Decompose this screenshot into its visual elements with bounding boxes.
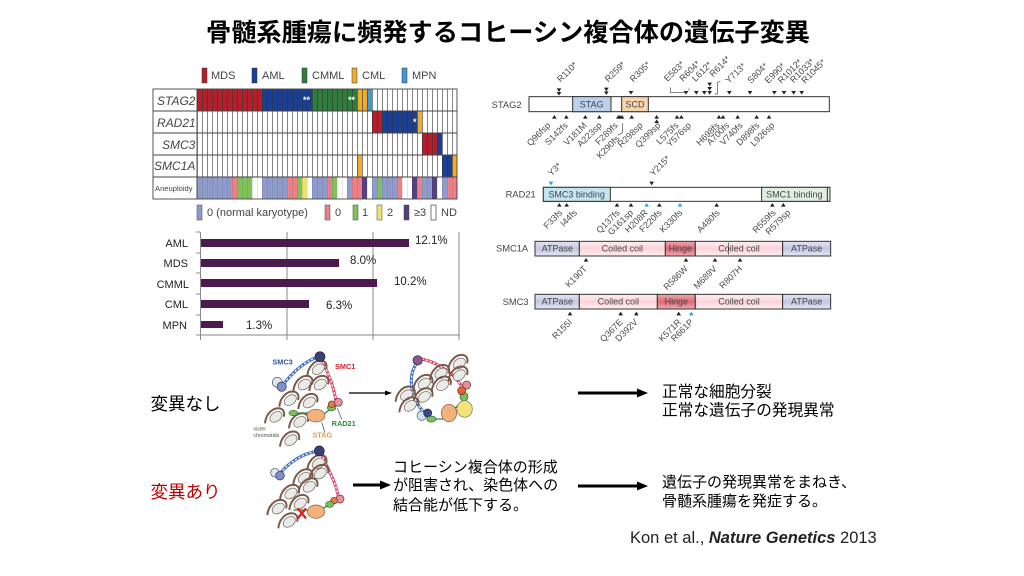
- mutation labels: Q367E: [598, 317, 625, 344]
- mutation labels below: S142fs: [543, 120, 570, 147]
- mutation labels above: R1012*: [776, 57, 804, 85]
- mutation labels: D392V: [613, 317, 640, 344]
- arrow: mutated outcome: [578, 482, 648, 490]
- icon: red cross: [298, 508, 306, 518]
- category labels: AML: [165, 238, 188, 250]
- protein map: SMC1A: Coiled coil: [602, 244, 643, 254]
- legend: karyotype: 0: [335, 207, 341, 219]
- mutation labels below: Q399sp: [633, 120, 662, 150]
- mutation labels: R807H: [717, 264, 744, 291]
- protein map: RAD21: RAD21: [506, 190, 536, 200]
- mutation labels: [546, 153, 672, 178]
- mutation labels above: S804*: [745, 61, 770, 85]
- legend: karyotype: 0 (normal karyotype): [207, 207, 308, 219]
- legend: disease types: MPN: [412, 70, 436, 82]
- legend: disease types: AML: [262, 70, 285, 82]
- mutation labels: Y3*: [546, 160, 564, 178]
- illustration: intact cohesin open: [253, 352, 356, 448]
- mutation labels below: V740fs: [718, 120, 745, 147]
- protein map: STAG2: [492, 54, 829, 161]
- illustration: intact cohesin open: sister: [253, 426, 266, 432]
- oncoprint grid: Aneuploidy: [155, 184, 193, 193]
- illustration: intact cohesin open: STAG: [312, 431, 332, 440]
- oncoprint grid: **: [303, 95, 311, 105]
- mutation labels below: Q96fsp: [525, 120, 552, 148]
- protein map: SMC3: Coiled coil: [718, 297, 760, 307]
- text: mutated outcome: 遺伝子の発現異常をまねき、: [662, 474, 856, 491]
- protein map: SMC1A: Coiled coil: [718, 244, 760, 254]
- arrow: intact to closed: [349, 390, 392, 396]
- illustration: intact cohesin open: chromatids: [253, 433, 280, 439]
- panel: mutation oncoprint: [153, 68, 457, 220]
- legend: disease types: MDS: [211, 70, 235, 82]
- illustration: intact cohesin open: SMC1: [335, 362, 355, 371]
- protein map: STAG2: SCD: [626, 99, 645, 109]
- value labels: 10.2%: [394, 276, 427, 288]
- value labels: 8.0%: [350, 255, 376, 267]
- legend: karyotype: ≥3: [414, 207, 426, 219]
- arrow: normal outcome: [578, 388, 648, 398]
- text: mutated outcome: 骨髄系腫瘍を発症する。: [662, 492, 827, 510]
- protein map: SMC3: Coiled coil: [598, 297, 639, 307]
- protein map: RAD21: K330fs: [658, 207, 685, 235]
- mutation labels above: L612*: [690, 59, 714, 83]
- mutation labels: M689V: [692, 264, 719, 291]
- mutation labels below: F289fs: [593, 120, 620, 147]
- text: cohesin formation impaired: が阻害され、染色体への: [393, 477, 558, 494]
- protein map: SMC3: SMC3: [503, 297, 529, 307]
- protein map: RAD21: A480fs: [695, 207, 722, 235]
- legend: karyotype: 2: [387, 207, 393, 219]
- protein map: RAD21: H208R: [623, 207, 650, 235]
- protein map: RAD21: R579sp: [763, 208, 792, 237]
- protein map: RAD21: F220fs: [637, 207, 664, 234]
- protein map: RAD21: Q137fs: [594, 207, 622, 235]
- legend: disease types: CMML: [312, 70, 344, 82]
- mutation labels above: R1045*: [799, 57, 828, 85]
- mutation labels: K571R: [657, 317, 683, 344]
- protein map: SMC3: ATPase: [542, 297, 573, 307]
- arrow: mutated to effect: [353, 480, 391, 490]
- oncoprint grid: STAG2: [157, 94, 196, 108]
- legend: karyotype: ND: [441, 207, 457, 219]
- protein map: RAD21: SMC1 binding: [766, 189, 823, 199]
- value labels: 6.3%: [326, 300, 352, 312]
- legend: karyotype: [197, 205, 457, 220]
- protein map: RAD21: R559fs: [751, 207, 778, 235]
- protein map: RAD21: I44fs: [558, 207, 579, 229]
- mutation labels below: R298sp: [616, 120, 645, 149]
- mutation labels above: R1033*: [788, 56, 817, 85]
- legend: disease types: [202, 68, 436, 83]
- mutation labels below: K290fs: [595, 133, 622, 161]
- mutation labels above: R614*: [707, 54, 732, 79]
- value labels: 1.3%: [246, 320, 272, 332]
- mutation labels above: E990*: [763, 61, 787, 85]
- mutation labels above: E583*: [662, 59, 687, 83]
- mutation labels above: R259*: [603, 59, 628, 84]
- protein map: RAD21: [506, 153, 830, 237]
- oncoprint grid: *: [413, 117, 417, 127]
- protein map: SMC1A: ATPase: [791, 244, 822, 254]
- mutation labels below: A223sp: [575, 120, 604, 149]
- mutation labels: Y215*: [648, 153, 672, 178]
- mutation labels: [563, 263, 744, 292]
- oncoprint grid: RAD21: [157, 116, 196, 130]
- mutation labels: R586W: [661, 263, 690, 292]
- category labels: MDS: [164, 258, 188, 270]
- mutation labels above: Y713*: [723, 61, 748, 85]
- bars: [201, 239, 409, 328]
- text: cohesin formation impaired: コヒーシン複合体の形成: [393, 459, 558, 476]
- legend: disease types: CML: [362, 70, 385, 82]
- mutation labels below: A700fs: [705, 120, 732, 147]
- illustration: intact cohesin open: SMC3: [272, 357, 293, 366]
- row label: with mutation: 変異あり: [150, 482, 220, 502]
- mutation labels below: D898fs: [734, 120, 762, 148]
- oncoprint grid: [153, 89, 457, 199]
- mutation labels below: L926sp: [748, 120, 776, 148]
- mutation labels below: H698fs: [694, 120, 722, 148]
- title: 骨髄系腫瘍に頻発するコヒーシン複合体の遺伝子変異: [206, 19, 810, 47]
- protein map: SMC3: Hinge: [665, 297, 688, 307]
- protein map: RAD21: SMC3 binding: [548, 189, 605, 199]
- mutation labels above: [555, 54, 828, 85]
- mutation labels above: R110*: [555, 59, 580, 84]
- protein map: SMC1A: ATPase: [542, 244, 573, 254]
- protein map: SMC1A: SMC1A: [496, 244, 529, 254]
- value labels: [246, 235, 448, 332]
- text: normal outcome: 正常な遺伝子の発現異常: [662, 402, 835, 420]
- value labels: 12.1%: [415, 235, 448, 247]
- citation: Kon et al., Nature Genetics 2013: [630, 529, 877, 547]
- protein map: SMC1A: Hinge: [669, 244, 692, 254]
- mutation labels below: [525, 120, 776, 161]
- category labels: CMML: [157, 279, 189, 291]
- oncoprint grid: SMC1A: [154, 159, 195, 173]
- protein map: SMC3: ATPase: [791, 297, 822, 307]
- mutation labels below: Y576sp: [664, 120, 693, 149]
- mutation labels: R661P: [669, 317, 695, 344]
- legend: karyotype: 1: [362, 207, 368, 219]
- protein map: STAG2: STAG: [580, 99, 604, 109]
- illustration: intact cohesin open: RAD21: [332, 419, 356, 428]
- category labels: CML: [165, 299, 188, 311]
- row label: no mutation: 変異なし: [150, 394, 220, 414]
- illustration: intact cohesin closed ring: [396, 355, 472, 422]
- protein map: RAD21: F33fs: [541, 207, 565, 231]
- illustration: mutated cohesin: [267, 446, 344, 529]
- oncoprint grid: **: [348, 95, 356, 105]
- mutation labels: [550, 317, 695, 344]
- protein map: SMC1A: [496, 241, 831, 292]
- oncoprint grid: SMC3: [162, 138, 196, 152]
- category labels: [157, 238, 189, 332]
- text: normal outcome: 正常な細胞分裂: [662, 383, 772, 401]
- mutation labels above: R604*: [677, 58, 702, 83]
- protein map: SMC3: [503, 294, 831, 344]
- mutation labels below: V181M: [562, 120, 589, 148]
- protein map: STAG2: STAG2: [492, 100, 522, 110]
- text: cohesin formation impaired: 結合能が低下する。: [393, 497, 528, 514]
- category labels: MPN: [163, 320, 187, 332]
- bar chart: mutation frequency: [157, 232, 460, 340]
- mutation labels above: R305*: [628, 59, 653, 84]
- mutation labels below: L575fs: [654, 120, 681, 146]
- mutation labels: R155I: [550, 317, 574, 341]
- mutation labels: K190T: [563, 263, 589, 289]
- protein map: RAD21: G161sp: [606, 208, 635, 237]
